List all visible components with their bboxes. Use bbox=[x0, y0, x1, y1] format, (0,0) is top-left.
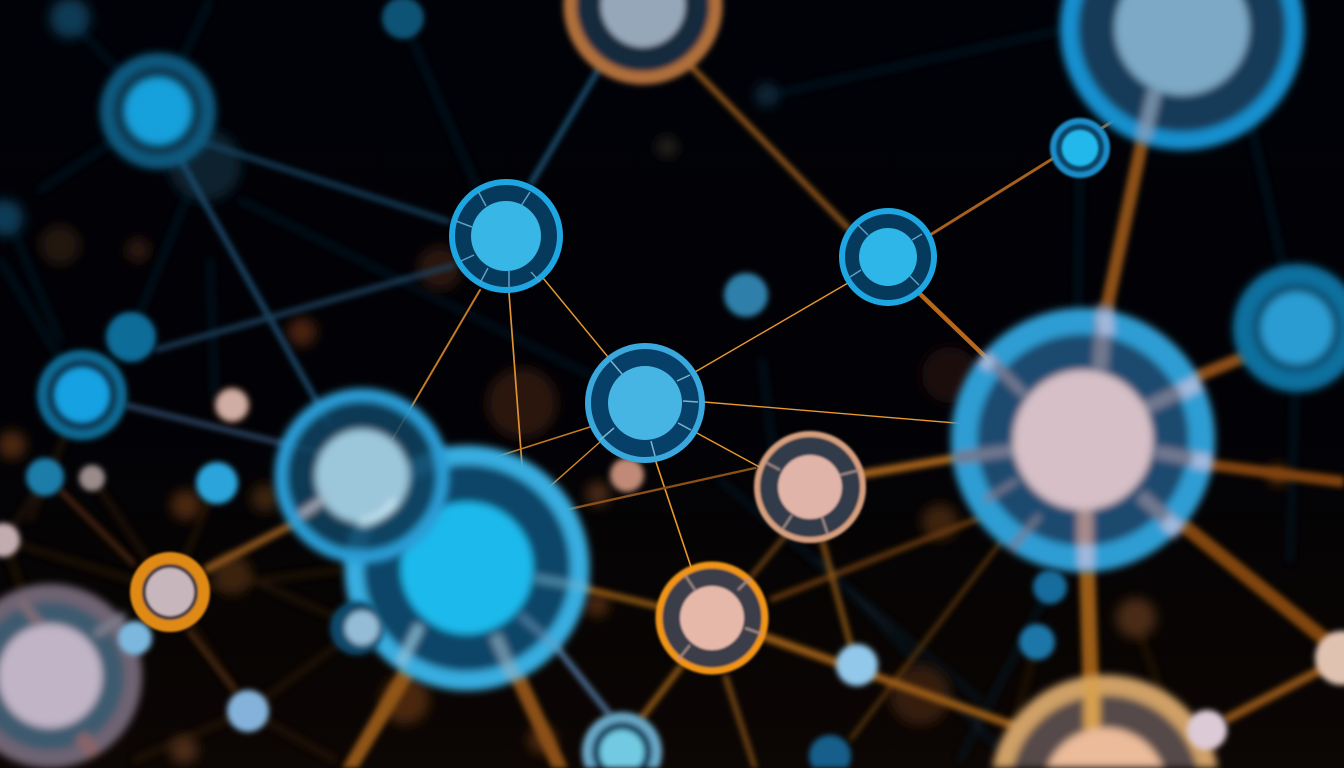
node: overlapping pale blue bbox=[281, 395, 443, 557]
node: right blue bbox=[1243, 274, 1344, 382]
node: left blue bbox=[42, 355, 122, 435]
node: upper left hub bbox=[452, 182, 560, 290]
node: large far-right blue bbox=[1069, 0, 1295, 141]
node: orange ring bbox=[659, 565, 765, 671]
node: top orange bbox=[570, 0, 716, 78]
node: top-left blue bbox=[107, 60, 209, 162]
node: top right small blue bbox=[1053, 121, 1107, 175]
node: main big blue lower centre bbox=[354, 455, 590, 681]
node: bottom-left gray bbox=[0, 593, 133, 759]
node: peach ring bbox=[757, 434, 863, 540]
blurred blue links bbox=[125, 50, 610, 715]
sharp thin links bbox=[392, 118, 1118, 570]
node: bottom centre blue bbox=[582, 712, 662, 768]
node: upper right hub bbox=[842, 211, 934, 303]
node: central hub bbox=[588, 346, 702, 460]
node: orange left bbox=[136, 558, 204, 626]
node: bottom-right peach bbox=[992, 675, 1218, 768]
node: large right blue with pale centre bbox=[955, 305, 1212, 568]
